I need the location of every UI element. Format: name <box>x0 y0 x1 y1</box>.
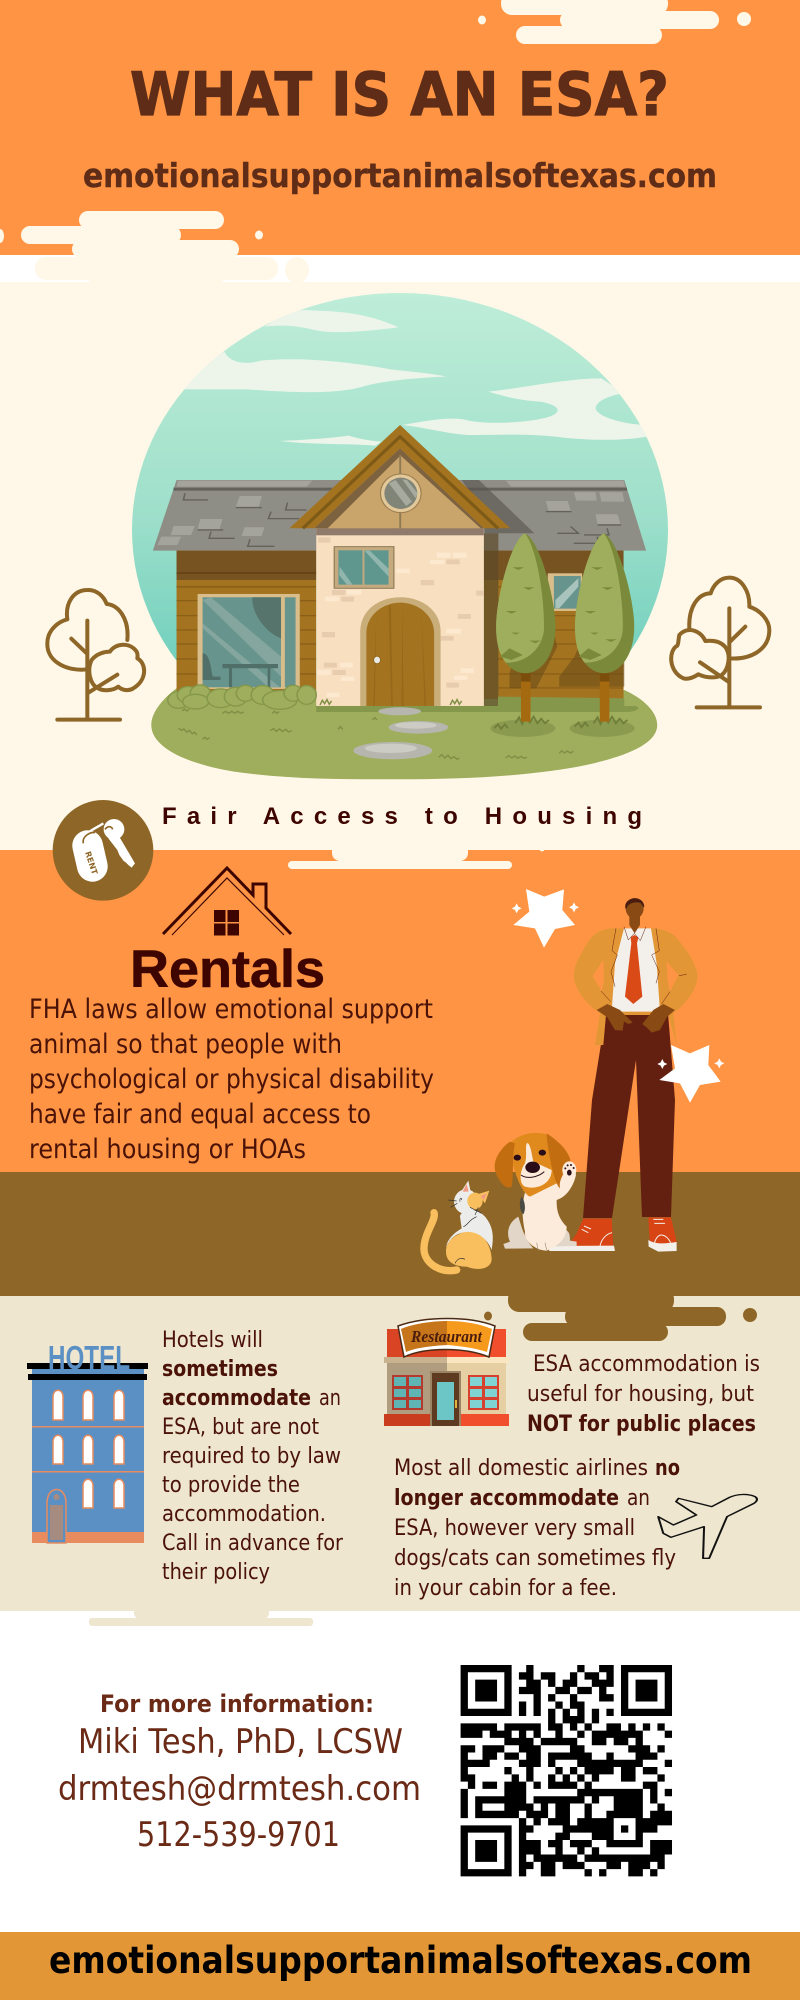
panel: ground band <box>0 1172 800 1296</box>
right side window <box>548 573 582 611</box>
tree shadows on lawn <box>490 720 635 737</box>
text: hotels paragraph: to provide the <box>162 1473 300 1498</box>
heading: rentals: Rentals <box>130 940 325 999</box>
text: hotels paragraph: ESA, but are not <box>162 1415 319 1440</box>
neck and head <box>629 915 640 933</box>
text: contact details <box>58 1690 421 1855</box>
text: hotels paragraph <box>162 1328 344 1585</box>
icon: outline tree right <box>671 578 769 707</box>
text: hotels paragraph: an <box>319 1386 341 1411</box>
QR code <box>461 1665 672 1876</box>
illustration: house <box>151 425 657 779</box>
jacket <box>574 928 698 1045</box>
text: hotels paragraph: sometimes <box>162 1357 278 1382</box>
text: airlines paragraph: Most all domestic airlines <box>394 1456 648 1481</box>
large sliding window <box>198 594 300 689</box>
dog <box>495 1133 577 1251</box>
shirt <box>612 928 660 1012</box>
icon: rent key badge: RENT <box>83 850 99 876</box>
sky clouds <box>177 310 647 446</box>
illustration: person <box>574 898 698 1218</box>
round attic window <box>381 474 421 513</box>
text: FHA paragraph: animal so that people with <box>29 1029 342 1060</box>
text: hotels paragraph: their policy <box>162 1560 270 1585</box>
text: hotels paragraph: Hotels will <box>162 1328 263 1353</box>
gable <box>289 425 510 528</box>
tree: left cypress <box>496 533 555 722</box>
icon: restaurant <box>384 1318 509 1426</box>
icon: rent key badge <box>53 800 153 901</box>
text: airlines paragraph: dogs/cats can sometimes fly <box>394 1546 676 1571</box>
text: FHA paragraph: rental housing or HOAs <box>29 1134 306 1165</box>
jacket lapel lines <box>601 927 687 1004</box>
text: ESA accommodation note <box>527 1352 760 1437</box>
text: airlines paragraph: an <box>627 1486 650 1511</box>
text: FHA paragraph: psychological or physical disability <box>29 1064 434 1095</box>
grass tufts <box>178 700 573 759</box>
lawn darker edge <box>316 697 638 712</box>
text: contact details: For more information: <box>100 1690 374 1718</box>
tie <box>625 935 642 1004</box>
icon: house roof outline <box>163 868 291 936</box>
text: FHA paragraph <box>29 994 434 1165</box>
trousers <box>583 1013 675 1218</box>
arched door <box>360 597 441 706</box>
icon: outline tree left <box>47 590 144 720</box>
icon: hotel <box>27 1339 148 1543</box>
arm cutouts <box>593 960 678 992</box>
text: hotels paragraph: Call in advance for <box>162 1531 344 1556</box>
text: contact details: drmtesh@drmtesh.com <box>58 1769 421 1809</box>
text: ESA accommodation note: NOT for public places <box>527 1412 756 1437</box>
front window <box>334 547 394 588</box>
website heading: emotionalsupportanimalsoftexas.com <box>83 156 717 195</box>
text: FHA paragraph: have fair and equal access to <box>29 1099 371 1130</box>
cloud: under ground band <box>484 1288 757 1341</box>
text: contact details: Miki Tesh, PhD, LCSW <box>78 1722 403 1762</box>
text: FHA paragraph: FHA laws allow emotional support <box>29 994 433 1025</box>
center brick front <box>316 528 484 706</box>
heading: fair access: Fair Access to Housing <box>162 803 642 830</box>
panel: rentals background <box>0 850 800 1172</box>
text: airlines paragraph: longer accommodate <box>394 1486 619 1511</box>
cloud: top right <box>478 0 751 44</box>
sky circle <box>132 293 668 767</box>
icon: restaurant: Restaurant <box>410 1327 483 1346</box>
bushes <box>168 685 316 709</box>
text: airlines paragraph: no <box>655 1456 680 1481</box>
cloud: header bottom left <box>0 211 309 285</box>
grass lawn <box>151 680 657 779</box>
panel: house background <box>0 282 800 850</box>
title: WHAT IS AN ESA? <box>130 60 669 130</box>
white band <box>0 255 800 282</box>
cat <box>424 1181 493 1271</box>
stepping stones <box>353 707 448 759</box>
text: hotels paragraph: required to by law <box>162 1444 341 1469</box>
cloud: under fair access <box>288 840 544 869</box>
cloud: bottom of travel panel <box>89 1605 313 1626</box>
left wood wall <box>177 551 316 694</box>
text: contact details: 512-539-9701 <box>137 1815 340 1855</box>
text: airlines paragraph: in your cabin for a fee. <box>394 1576 617 1601</box>
text: hotels paragraph: accommodation. <box>162 1502 326 1527</box>
text: airlines paragraph <box>394 1456 680 1601</box>
text: airlines paragraph: ESA, however very small <box>394 1516 635 1541</box>
icon: stars <box>512 889 724 1103</box>
panel: travel background <box>0 1296 800 1611</box>
roof <box>153 480 646 551</box>
text: hotels paragraph: accommodate <box>162 1386 311 1411</box>
icon: airplane <box>658 1494 757 1558</box>
icon: hotel: HOTEL <box>48 1339 130 1376</box>
right wood wall <box>484 533 624 706</box>
text: ESA accommodation note: useful for housing, but <box>527 1382 754 1407</box>
shoes <box>548 1217 677 1252</box>
illustration: shoes, dog and cat <box>424 1133 677 1271</box>
grass around trees <box>494 717 627 729</box>
panel: footer band <box>0 1932 800 2000</box>
hands <box>597 1004 633 1031</box>
tree: right cypress <box>575 533 634 722</box>
panel: header background <box>0 0 800 255</box>
text: ESA accommodation note: ESA accommodation is <box>533 1352 760 1377</box>
